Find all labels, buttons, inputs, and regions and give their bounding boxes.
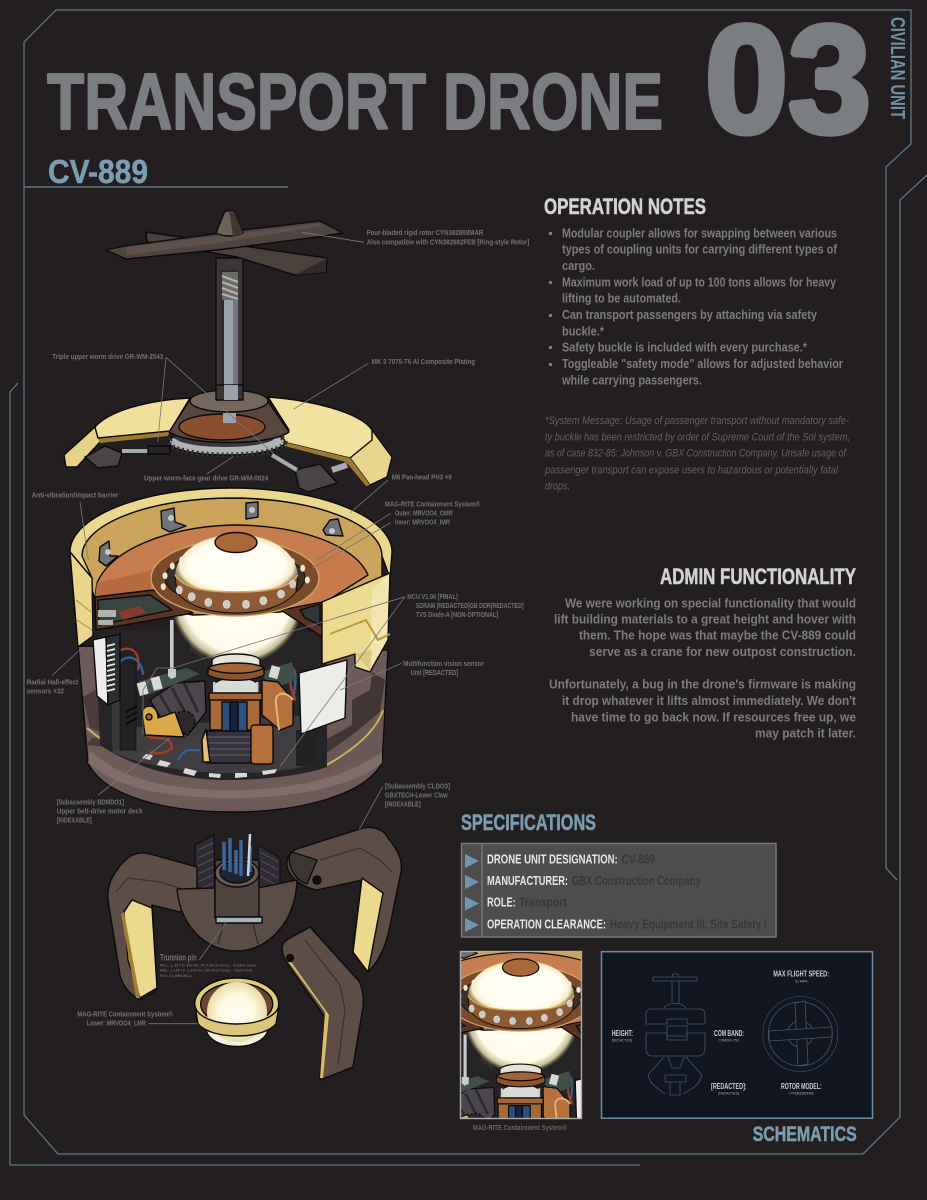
bullet list: cargo.	[562, 258, 595, 273]
callout: claw: [Subassembly CLDO3]	[385, 781, 450, 790]
right yellow panel	[322, 573, 390, 672]
callout: trunnion pin: FOS: 4:1 (MBL/WLL)	[160, 974, 192, 978]
model designation: CV-889	[48, 153, 148, 190]
callout: MCU: TVS Diode-A [NON-OPTIONAL]	[416, 610, 499, 619]
spec row: clearance: OPERATION CLEARANCE:	[487, 918, 606, 932]
heading: operation notes: OPERATION NOTES	[544, 194, 706, 219]
admin text block: have time to go back now. If resources free up, we	[571, 709, 856, 724]
caption: containment: MAG-RITE Containment System®	[473, 1124, 568, 1132]
hub	[169, 385, 289, 442]
panel: schematics	[602, 952, 872, 1118]
interior cavity	[95, 628, 327, 780]
schematic: redacted: [REDACTED]	[718, 1091, 739, 1095]
schematic: com band: COM BAND:	[714, 1029, 744, 1038]
schematic: side view	[646, 974, 705, 1095]
drawing: claw assembly	[108, 827, 401, 1080]
yellow arm right	[268, 397, 392, 486]
callout: belt drive deck: [INDEXABLE]	[57, 816, 92, 825]
floor tiles	[142, 754, 277, 778]
left claw	[108, 853, 197, 1000]
bullet list: buckle.*	[562, 323, 605, 338]
schematic: max speed: MAX FLIGHT SPEED:	[773, 970, 829, 979]
callout: hall sensors: Radial Hall-effect	[27, 677, 79, 686]
bullet list: Maximum work load of up to 100 tons allows for heavy	[562, 274, 837, 289]
panel: specifications	[461, 810, 776, 937]
rotor blades	[106, 211, 343, 275]
callout: containment upper	[385, 499, 480, 527]
circuit boards	[137, 662, 296, 696]
panel: operation notes	[544, 194, 843, 387]
center cup	[177, 834, 297, 951]
callout: trunnion pin: WLL: ⟂ 35 t (≈ 343 kN, 35.5 short tons) – double shear	[160, 964, 257, 968]
callout: trunnion pin: MBL: ⟂ 140 t (≈ 1,373 kN, 154 short tons) – static limit	[160, 968, 253, 972]
admin text block: Unfortunately, a bug in the drone's firmware is making	[549, 677, 856, 692]
wires	[120, 649, 296, 760]
callout: containment upper: Inner: MRVOO4_IMR	[395, 518, 450, 527]
bullet list: lifting to be automated.	[562, 291, 681, 306]
gear ring	[169, 427, 285, 455]
dome	[175, 534, 298, 597]
schematic: height: [REDACTED]	[612, 1038, 632, 1042]
schematic: height: HEIGHT:	[612, 1029, 633, 1038]
bullet list: Toggleable "safety mode" allows for adjusted behavior	[562, 356, 843, 371]
spec row: role: ROLE:	[487, 896, 516, 910]
schematic: redacted	[711, 1082, 747, 1095]
callout: trunnion pin: Trunnion pin	[160, 953, 197, 964]
callout: containment lower: MAG-RITE Containment System®	[77, 1010, 173, 1019]
callout: containment upper: Outer: MRVOO4_OMR	[395, 509, 453, 518]
drawing: rotor assembly	[64, 211, 392, 492]
callout: containment lower: Lower: MRVOO4_LMR	[87, 1019, 146, 1028]
callout: vision sensor: Unit [REDACTED]	[411, 668, 458, 677]
spec row: role	[487, 896, 567, 910]
bullet list: Can transport passengers by attaching via safety	[562, 307, 818, 322]
bullet list	[549, 226, 843, 387]
callout: containment lower	[77, 1010, 173, 1028]
callout: claw	[385, 781, 450, 808]
system message: as of case 832-85: Johnson v. GBX Construction Company. Unsafe usage of	[545, 448, 847, 460]
lower housing	[78, 646, 388, 812]
left white panel	[93, 634, 120, 705]
deck underside left	[95, 590, 193, 630]
title: TRANSPORT DRONE	[47, 57, 663, 146]
admin text block: may patch it later.	[755, 726, 856, 741]
heading: schematics: SCHEMATICS	[753, 1123, 857, 1146]
system message: drops.	[545, 480, 570, 492]
wiring bundle	[195, 835, 280, 915]
callout: hall sensors: sensors ×32	[27, 686, 64, 695]
spec row: designation: CV-889	[622, 852, 655, 866]
containment front band	[175, 575, 298, 613]
callout: belt drive deck: Upper belt-drive motor deck	[57, 807, 143, 816]
lower containment bowl	[195, 978, 279, 1046]
system message: ty buckle has been restricted by order of Supreme Court of the Sol system,	[545, 432, 850, 444]
schematic: rotor model	[781, 1082, 822, 1095]
admin text block: serve as a crane for new outpost construction.	[589, 644, 856, 659]
spec row: clearance	[487, 918, 767, 932]
callout: containment upper: MAG-RITE Containment System®	[385, 499, 480, 508]
belt motor	[202, 725, 273, 764]
callout: rotor: Also compatible with CYN382682FEB [Ring-style Rotor]	[367, 237, 530, 246]
schematic: com band: COMSIG-T92	[718, 1038, 739, 1042]
schematic: com band	[714, 1029, 744, 1042]
containment flange	[151, 540, 319, 616]
heading: admin functionality: ADMIN FUNCTIONALITY	[660, 564, 856, 589]
system message: *System Message: Usage of passenger transport without mandatory safe-	[545, 415, 849, 427]
callout: barrier: Anti-vibration/impact barrier	[32, 490, 118, 499]
spec row: manufacturer	[487, 874, 701, 888]
yellow rim	[70, 488, 392, 603]
worm shaft	[216, 258, 243, 400]
callout: MCU	[407, 592, 524, 619]
callout: plating: MK 3 7075-T6 Al Composite Plating	[372, 357, 475, 366]
deck underside right	[281, 602, 322, 637]
callout: trunnion pin	[160, 953, 257, 978]
callout labels	[27, 228, 530, 1028]
admin text block: them. The hope was that maybe the CV-889 could	[579, 628, 856, 643]
left yellow panel	[70, 552, 93, 647]
panel: admin functionality	[549, 564, 857, 741]
callout: gear drive: Upper worm-face gear drive GR-WM-0024	[144, 474, 269, 483]
heading: specifications: SPECIFICATIONS	[461, 810, 596, 835]
leader lines	[52, 232, 405, 1024]
admin text block: lift building materials to a great height and hover with	[554, 611, 856, 626]
callout: belt drive deck: [Subassembly BDMDO1]	[57, 798, 124, 807]
callout: hall sensors	[27, 677, 79, 695]
schematic: max speed	[773, 970, 829, 983]
callout: MCU: MCU V1.06 [FINAL]	[407, 592, 458, 601]
schematic: height	[612, 1029, 633, 1042]
spec row: role: Transport	[519, 896, 567, 910]
callout: worm drive: Triple upper worm drive GR-WM-2543	[52, 352, 163, 361]
schematic: top view	[763, 996, 838, 1072]
callout: MCU: SDRAM [REDACTED]GB DDR[REDACTED]	[416, 601, 524, 610]
callout: pan-head: M8 Pan-head PH3 ×9	[392, 472, 452, 481]
post	[168, 620, 176, 679]
vision sensor panel	[299, 660, 347, 734]
schematic: rotor model: ROTOR MODEL:	[781, 1082, 822, 1091]
callout: belt drive deck	[57, 798, 143, 825]
spec box	[462, 844, 776, 937]
core reactor	[208, 654, 293, 732]
bullet list: while carrying passengers.	[561, 372, 702, 387]
schematic: redacted: [REDACTED]:	[711, 1082, 747, 1091]
bullet list: types of coupling units for carrying different types of	[562, 242, 838, 257]
detached claw	[282, 927, 363, 1080]
admin text block	[549, 595, 857, 741]
spec row: clearance: Heavy Equipment III, Site Safety I	[610, 918, 767, 932]
drawing: main body section	[70, 488, 392, 812]
reactor cap	[215, 532, 257, 552]
worm motors	[85, 446, 347, 492]
callout: vision sensor	[403, 659, 484, 677]
mounting brackets	[99, 502, 343, 566]
callout: rotor	[367, 228, 530, 246]
panel: containment close-up	[460, 950, 582, 1120]
callout: claw: GBXTECH-Lower Claw	[385, 790, 448, 799]
spec row: manufacturer: GBX Construction Company	[572, 874, 701, 888]
schematic: rotor model: CYN382682FEB	[788, 1091, 814, 1095]
callout: vision sensor: Multifunction vision sensor	[403, 659, 484, 668]
admin text block: it drop whatever it lifts almost immediately. We don't	[562, 693, 857, 708]
callout: claw: [INDEXABLE]	[385, 799, 421, 808]
motor rollers	[142, 681, 206, 737]
schematic: max speed: 63 MPH	[795, 979, 808, 983]
right claw	[287, 827, 401, 972]
system message	[544, 415, 850, 492]
system message: passenger transport can expose users to hazardous or potentially fatal	[544, 464, 838, 476]
orange deck	[95, 525, 368, 615]
civilian unit label: CIVILIAN UNIT	[886, 17, 908, 119]
spec row: designation: DRONE UNIT DESIGNATION:	[487, 852, 618, 866]
spec row: manufacturer: MANUFACTURER:	[487, 874, 568, 888]
admin text block: We were working on special functionality that would	[565, 595, 856, 610]
bullet list: Safety buckle is included with every purchase.*	[562, 340, 808, 355]
callout: rotor: Four-bladed rigid rotor CYN382888MAR	[367, 228, 484, 237]
bullet list: Modular coupler allows for swapping between various	[562, 226, 837, 240]
yellow arm left	[64, 398, 190, 467]
spec arrows	[465, 854, 479, 932]
lower sphere glow	[170, 531, 304, 665]
